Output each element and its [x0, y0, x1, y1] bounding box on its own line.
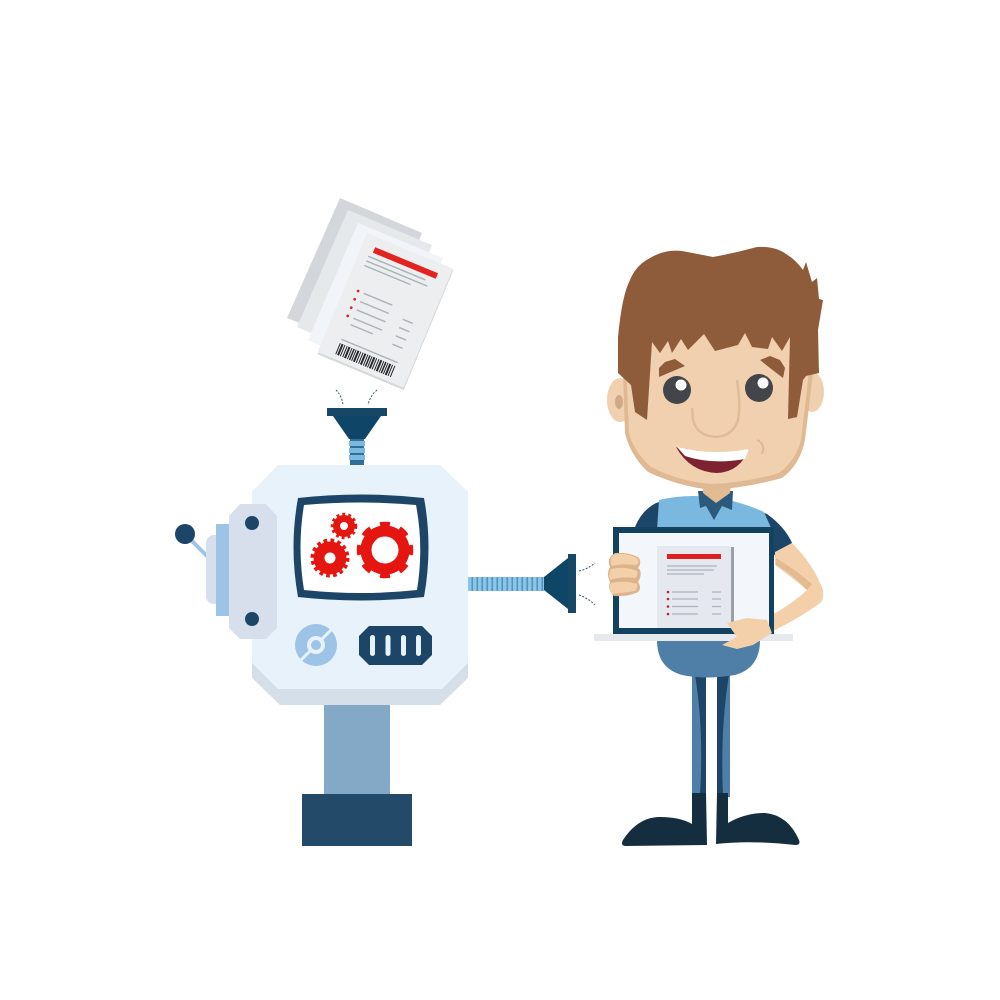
eyes	[663, 374, 773, 404]
right arm	[764, 543, 823, 634]
screen	[294, 494, 428, 600]
mouth	[676, 447, 749, 473]
left fist	[608, 553, 641, 596]
hair	[618, 247, 823, 420]
dashes above funnel	[336, 390, 377, 405]
right hand	[722, 618, 772, 649]
robot body	[229, 465, 468, 705]
document stack	[287, 198, 454, 390]
side panel back	[206, 524, 230, 616]
laptop	[594, 527, 793, 641]
ears	[607, 372, 824, 422]
man	[594, 247, 824, 846]
cheek line	[757, 440, 763, 454]
lever	[175, 524, 208, 557]
neck	[702, 478, 732, 503]
eyebrows	[659, 356, 785, 378]
face	[622, 300, 813, 490]
vent	[359, 626, 432, 665]
disc icon	[295, 624, 337, 666]
shirt	[635, 491, 792, 560]
robot stand	[302, 704, 412, 846]
top funnel	[327, 408, 387, 465]
gears	[313, 514, 410, 575]
nose	[692, 380, 739, 437]
trousers	[657, 640, 760, 678]
legs and shoes	[622, 672, 800, 846]
right funnel and spring	[468, 554, 576, 613]
dashes beside funnel	[579, 563, 595, 605]
front page	[317, 233, 454, 390]
